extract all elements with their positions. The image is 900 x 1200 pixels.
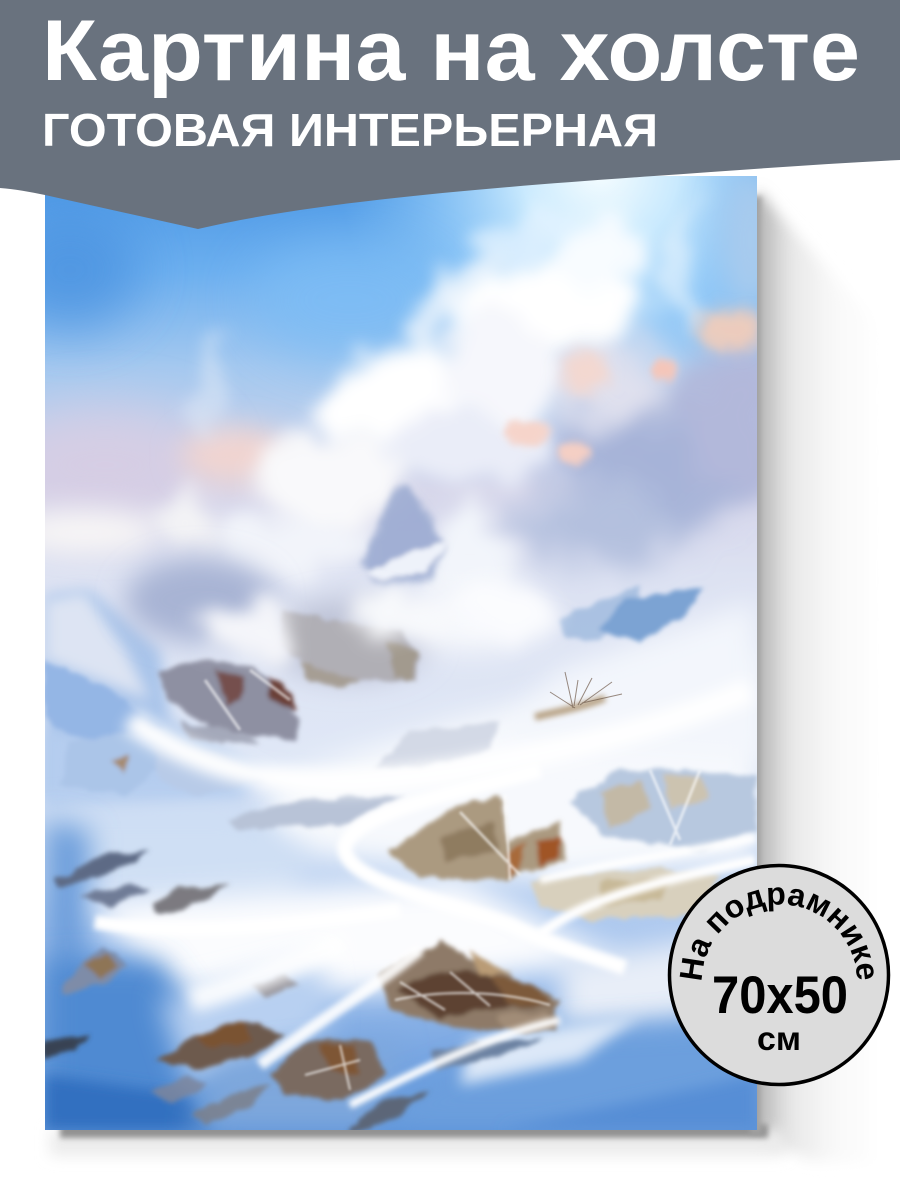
upper-left brown ridges [45, 852, 300, 1058]
white wind streaks [95, 670, 755, 1105]
facets, rocks and peaks [45, 585, 757, 1130]
painting: snowy mountain landscape [0, 170, 785, 1130]
canvas side shadow [50, 190, 900, 1165]
right tan slope [530, 770, 757, 920]
blue snow facets [45, 585, 705, 795]
peach glow spots [505, 308, 764, 464]
badge unit: см [757, 1020, 801, 1057]
banner [0, 0, 900, 229]
distant peak [362, 482, 448, 585]
badge size: 70x50 [712, 966, 848, 1025]
bare bush [535, 672, 622, 717]
central tan rock [388, 795, 565, 880]
title: Картина на холсте [42, 3, 860, 99]
lower-left facets [110, 722, 500, 828]
size badge [668, 864, 890, 1086]
subtitle: ГОТОВАЯ ИНТЕРЬЕРНАЯ [42, 104, 658, 156]
sky and base colour [0, 170, 780, 1130]
land base [45, 558, 757, 1130]
white snow-smoke over rocks [202, 582, 550, 656]
left ridge rock [158, 608, 420, 745]
badge arc text: На подрамнике [680, 887, 874, 980]
big brown rock field [150, 940, 560, 1130]
clouds [153, 204, 757, 590]
